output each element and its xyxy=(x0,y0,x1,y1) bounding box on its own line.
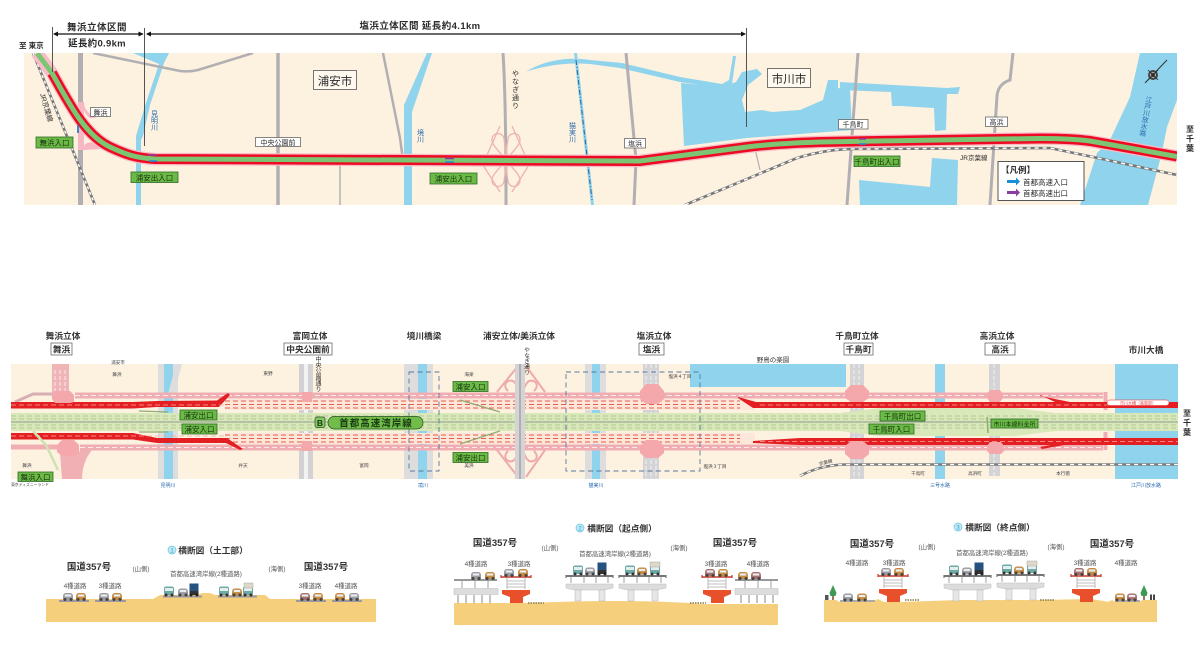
section 1 road decks xyxy=(59,596,362,601)
to Tokyo label: 至 東京 xyxy=(19,40,44,50)
section 3 trees and pedestrians xyxy=(825,585,1154,600)
plan place names: 千鳥町 xyxy=(911,470,925,477)
section 2 labels: 3種道路 xyxy=(508,559,531,568)
panel: detailed plan view xyxy=(11,330,1192,489)
section 2 labels: 首都高速湾岸線(2種道路) xyxy=(579,549,651,558)
ramp labels on plan xyxy=(18,382,1038,482)
section 3 vehicles xyxy=(843,561,1137,602)
interchange headings: 市川大橋 xyxy=(1129,344,1164,355)
plan place names: 塩浜３丁目 xyxy=(704,463,726,470)
section 3 labels: (山側) xyxy=(918,543,936,551)
dashed study areas xyxy=(409,372,700,471)
section 1 vehicles xyxy=(63,583,359,601)
map place and river labels: 見明川 xyxy=(150,110,158,131)
plan Bayshore lanes xyxy=(11,400,1178,444)
interchange headings: 中央公園前 xyxy=(286,344,330,354)
city label: Urayasu: 浦安市 xyxy=(318,75,352,88)
plan place names: 東野 xyxy=(263,370,273,377)
section dimension: Maihama xyxy=(52,22,746,146)
Ichikawa bridge tag: 市川大橋（高架部） xyxy=(1120,400,1156,406)
section 1 labels: 4種道路 xyxy=(64,581,87,590)
interchange headings: 千鳥町 xyxy=(845,344,872,354)
Bayshore route highway line xyxy=(37,53,1177,161)
section 3 labels: 国道357号 xyxy=(850,538,895,550)
panel: route map xyxy=(19,20,1194,205)
Urayasu cloverleaf interchange xyxy=(483,126,529,192)
map background xyxy=(24,53,1177,205)
ramp labels on map: 千鳥町出入口 xyxy=(854,156,900,166)
map place and river labels: 猫実川 xyxy=(568,121,576,143)
legend xyxy=(998,162,1084,200)
to Chiba label on plan: 至千葉 xyxy=(1182,409,1192,438)
interchange headings: 境川橋梁 xyxy=(407,330,442,341)
section 2 elevated structures xyxy=(454,575,778,603)
section 2 labels: (山側) xyxy=(541,544,559,552)
section 1 labels: 4種道路 xyxy=(335,581,358,590)
ramp labels on map xyxy=(36,137,900,184)
section 2 labels: 国道357号 xyxy=(713,537,758,549)
station labels: 中央公園前 xyxy=(260,138,296,147)
section 2 labels: 4種道路 xyxy=(465,559,488,568)
interchange headings: 舞浜 xyxy=(53,344,70,354)
Maihama interchange ramps xyxy=(78,102,118,150)
map roads xyxy=(80,53,1013,205)
JR Keiyo line xyxy=(33,53,1177,205)
plan red Route 357 viaducts xyxy=(11,393,1178,450)
city label: Ichikawa xyxy=(768,68,810,88)
interchange headings: 高浜 xyxy=(991,344,1009,354)
interchange headings: 塩浜 xyxy=(643,344,660,354)
city label: Ichikawa: 市川市 xyxy=(772,73,806,86)
ramp labels on map: 浦安出入口 xyxy=(435,174,472,184)
plan place names: 浦安市 xyxy=(111,359,125,366)
plan surface lanes under construction xyxy=(225,399,755,444)
section 3 labels: 国道357号 xyxy=(1090,538,1135,550)
plan place names: 塩浜４丁目 xyxy=(669,373,691,380)
panel: cross section 1 embankment xyxy=(46,544,376,622)
section 1 labels: 国道357号 xyxy=(67,561,112,573)
interchange headings: 浦安立体/美浜立体 xyxy=(483,330,555,341)
plan Urayasu interchange xyxy=(497,366,545,477)
plan place names: 海楽 xyxy=(464,371,474,378)
route banner: B xyxy=(317,418,323,428)
plan place names: 見明川 xyxy=(160,483,176,489)
section 3 title: 3 xyxy=(956,526,960,532)
plan intersections xyxy=(52,384,1004,459)
station labels: 高浜 xyxy=(990,118,1004,126)
ramp labels on plan: 浦安出口 xyxy=(184,410,214,420)
ramp labels on plan: 千鳥町出口 xyxy=(884,411,921,421)
legend: 【凡例】 xyxy=(1001,165,1035,175)
section dimension: Shiohama: 塩浜立体区間 延長約4.1km xyxy=(359,20,481,32)
plan place names: 弁天 xyxy=(238,462,248,469)
plan place names: 中央公園通り xyxy=(314,355,321,392)
panel: cross section 2 start side xyxy=(454,522,778,625)
station labels: 塩浜 xyxy=(628,139,642,148)
section 3 labels: 4種道路 xyxy=(846,558,869,567)
interchange headings xyxy=(46,330,1164,355)
map place and river labels: 境川 xyxy=(416,128,424,143)
section 1 labels: 首都高速湾岸線(2種道路) xyxy=(170,569,242,578)
route banner: 首都高速湾岸線 xyxy=(339,418,413,430)
Maihama on-ramp xyxy=(33,431,58,470)
section dimension: Maihama: 舞浜立体区間 xyxy=(67,22,127,34)
section 3 labels: 4種道路 xyxy=(1115,558,1138,567)
plan Shinsui toll road xyxy=(987,417,988,433)
ramp labels on plan: 浦安出口 xyxy=(456,452,486,462)
map waterways xyxy=(133,53,1177,205)
section 1 labels: 国道357号 xyxy=(304,561,349,573)
plan place names: 本行徳 xyxy=(1056,470,1070,477)
panel: cross section 3 end side xyxy=(824,522,1157,622)
section 1 labels: 3種道路 xyxy=(99,581,122,590)
plan place names: 京葉線 xyxy=(818,457,834,468)
ramp arrows xyxy=(78,125,866,162)
ramp labels on plan: 浦安入口 xyxy=(184,424,214,434)
plan place names xyxy=(11,347,1161,489)
interchange headings: 千鳥町立体 xyxy=(835,330,879,341)
interchange headings: 舞浜立体 xyxy=(46,330,81,341)
plan place names: 江戸川放水路 xyxy=(1131,482,1161,489)
section 3 labels: 3種道路 xyxy=(883,558,906,567)
city label: Urayasu xyxy=(314,70,356,90)
section 3 labels: 首都高速湾岸線(2種道路) xyxy=(956,548,1028,557)
icon: compass xyxy=(1145,60,1167,83)
section dimension: Maihama: 延長約0.9km xyxy=(68,38,126,50)
map place and river labels: JR京葉線 xyxy=(960,153,988,162)
interchange headings: 塩浜立体 xyxy=(637,330,672,341)
interchange headings: 高浜立体 xyxy=(980,330,1015,341)
section 1 title: 1 xyxy=(170,548,174,554)
section 3 labels xyxy=(846,538,1138,567)
ramp labels on plan: 市川本線料金所 xyxy=(993,420,1036,428)
map place and river labels: 江戸川放水路 xyxy=(1137,95,1153,138)
plan place names: 高浜町 xyxy=(968,470,982,477)
map river centre line xyxy=(576,60,592,200)
section 3 labels: 3種道路 xyxy=(1074,558,1097,567)
plan background xyxy=(11,364,1178,479)
plan JR Keiyo line xyxy=(800,464,1178,476)
plan place names: 境川 xyxy=(418,482,428,489)
section 2 title: 2 xyxy=(578,526,582,532)
plan cross roads xyxy=(52,364,1000,479)
section 1 ground xyxy=(46,593,376,622)
section 1 labels: 3種道路 xyxy=(299,581,322,590)
section 1 labels: (海側) xyxy=(268,564,286,573)
section 1 labels xyxy=(64,561,358,590)
plan place names: 東京ディズニーランド xyxy=(11,482,49,487)
station labels xyxy=(90,108,1008,148)
section dimension: Shiohama xyxy=(146,20,746,36)
plan viaduct lane marks xyxy=(11,405,1178,442)
section 2 labels: 国道357号 xyxy=(473,537,518,549)
Urayasu interchange overpass xyxy=(515,364,525,479)
plan place names: 三号水路 xyxy=(930,482,950,489)
section 2 labels xyxy=(465,537,770,568)
section 2 title: 横断図（起点側） xyxy=(587,522,657,534)
route banner xyxy=(315,416,423,430)
station labels: 千鳥町 xyxy=(842,120,864,129)
section 3 title: 横断図（終点側） xyxy=(965,522,1035,532)
section 2 vehicles xyxy=(471,562,761,580)
section 2 ground xyxy=(454,601,778,625)
plan frontage roads xyxy=(11,392,1106,450)
Ichikawa bridge tag xyxy=(1107,400,1169,406)
ramp labels on plan: 千鳥町入口 xyxy=(873,424,910,434)
ramp labels on plan: 浦安入口 xyxy=(456,382,486,392)
plan place names: 舞浜 xyxy=(112,371,122,378)
section 2 labels: (海側) xyxy=(670,543,688,552)
plan place names: 富岡 xyxy=(359,462,369,469)
to Chiba label: 至千葉 xyxy=(1186,125,1194,154)
map place and river labels xyxy=(38,70,1153,162)
ramp labels on map: 舞浜入口 xyxy=(40,138,70,148)
legend: 首都高速出口 xyxy=(1023,188,1068,198)
section 1 title: 横断図（土工部） xyxy=(178,544,248,556)
plan place names: 舞浜 xyxy=(22,462,32,469)
legend: 首都高速入口 xyxy=(1023,177,1068,187)
section 3 ground xyxy=(824,599,1157,622)
plan waterways xyxy=(158,364,1178,479)
plan place names: やなぎ通り xyxy=(523,347,530,375)
plan place names: 野鳥の楽園 xyxy=(757,355,789,364)
plan place names: 猫実川 xyxy=(588,482,604,489)
map place and river labels: JR京葉線 xyxy=(38,92,55,123)
plan place names: 美浜 xyxy=(464,462,474,469)
section 1 labels: (山側) xyxy=(132,565,150,573)
section 3 elevated structures xyxy=(840,574,1140,602)
map place and river labels: やなぎ通り xyxy=(512,70,519,110)
section 2 labels: 4種道路 xyxy=(747,559,770,568)
ramp labels on map: 浦安出入口 xyxy=(136,172,173,182)
section 3 labels: (海側) xyxy=(1047,542,1065,551)
section 2 labels: 3種道路 xyxy=(705,559,728,568)
station labels: 舞浜 xyxy=(94,108,108,117)
ramp labels on plan: 舞浜入口 xyxy=(20,472,50,482)
interchange headings: 富岡立体 xyxy=(293,330,328,341)
